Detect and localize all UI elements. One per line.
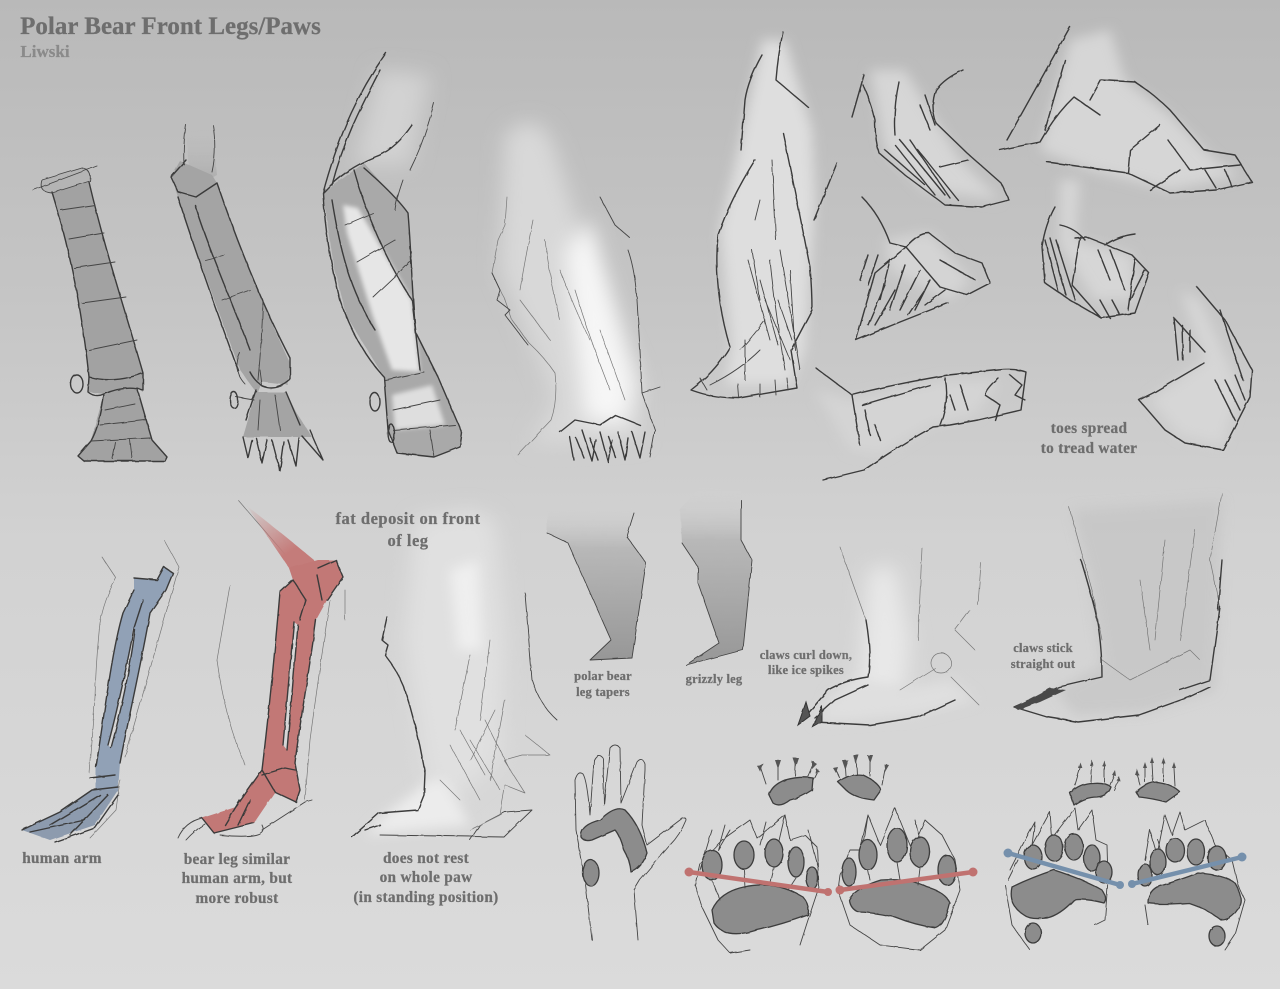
label: fat deposit: fat deposit on front: [336, 509, 480, 528]
figure: grizzly leg silhouette: [680, 487, 752, 665]
figure: furry leg: [492, 123, 660, 462]
figure: sketch paw lower right: [1139, 287, 1252, 450]
author credit: Liwski: [20, 42, 70, 61]
figure: paw underside left with red line: [684, 815, 832, 953]
figure: polar bear foot, curled claws: [798, 547, 981, 727]
figure: human arm bones: [22, 540, 179, 842]
figure: sketch paw underside: [856, 197, 990, 340]
figure: skeletal leg: [171, 125, 323, 471]
red alignment line right: [836, 868, 978, 894]
figure: bear leg bones: [178, 500, 345, 840]
figure: grizzly small pads with arrows: [1070, 757, 1180, 805]
label: standing position: (in standing position): [353, 889, 499, 906]
figure: sketch fist paw: [1042, 180, 1149, 318]
label: like ice spikes: like ice spikes: [768, 663, 844, 677]
blue alignment line: [1004, 848, 1124, 889]
label: polar bear leg tapers: polar bear: [574, 669, 632, 683]
label: claws stick: claws stick: [1013, 641, 1073, 655]
label: bear leg: bear leg similar: [184, 851, 290, 868]
figure: cylinder-form leg: [33, 166, 167, 461]
label: on whole paw: on whole paw: [380, 869, 472, 886]
figure: paw underside right with red line: [836, 808, 978, 950]
label: more robust: more robust: [195, 890, 279, 907]
label: of leg: of leg: [387, 531, 429, 550]
figure: human hand diagram: [575, 745, 686, 940]
figure: sketch paw top right: [1000, 27, 1252, 193]
figure: polar bear leg silhouette: [547, 500, 646, 660]
figure: grizzly paw left with blue line: [1004, 808, 1124, 950]
figure: paw grip small pads with arrows left: [757, 755, 889, 805]
figure: sketch outstretched arm: [815, 368, 1026, 480]
figure: muscle leg: [323, 53, 462, 457]
figure: ink leg sketch: [691, 32, 837, 398]
blue alignment line right: [1128, 852, 1246, 888]
label: grizzly leg: grizzly leg: [686, 672, 743, 686]
label: human arm: human arm: [22, 850, 102, 867]
label: leg tapers: leg tapers: [576, 685, 630, 699]
label: toes spread: toes spread: [1051, 420, 1127, 437]
red alignment line: [684, 868, 832, 896]
label: does not rest: does not rest: [383, 850, 470, 867]
figure: grizzly paw right with blue line: [1128, 812, 1246, 950]
label: human arm more robust: human arm, but: [182, 870, 293, 887]
figure: sketch paw top middle: [852, 70, 1009, 207]
figure: grizzly foot, straight claws: [1014, 493, 1222, 722]
label: claws curl down: claws curl down,: [760, 648, 852, 662]
title: Polar Bear Front Legs/Paws: [20, 13, 321, 40]
label: straight out: straight out: [1011, 657, 1076, 671]
label: tread water: to tread water: [1041, 440, 1137, 457]
figure: standing furry leg: [352, 510, 557, 840]
